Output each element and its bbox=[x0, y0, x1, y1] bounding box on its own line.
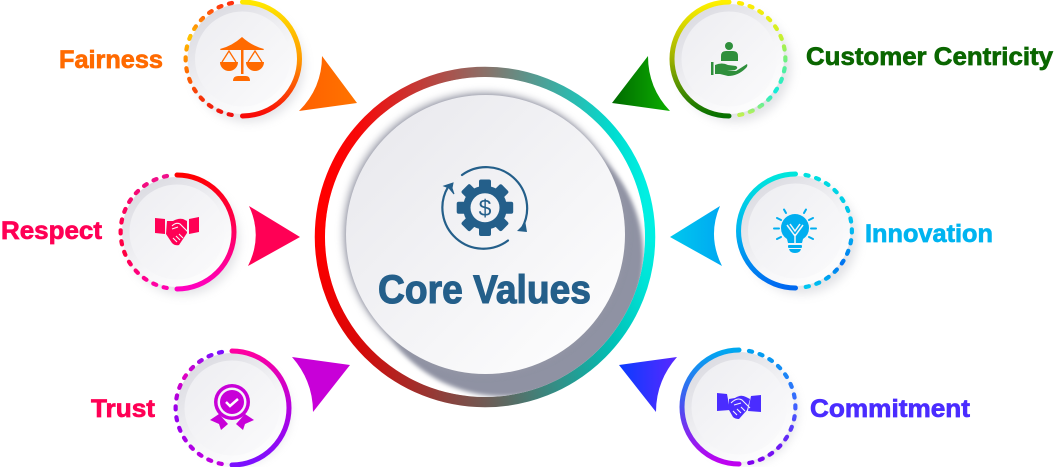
panel: customer centricity badge bbox=[672, 2, 791, 122]
icon: hand holding person bbox=[711, 42, 747, 76]
arrow: innovation bbox=[670, 206, 722, 266]
icon: scales of justice bbox=[220, 37, 264, 81]
panel: respect badge bbox=[121, 175, 239, 295]
panel: trust badge bbox=[176, 351, 290, 465]
arrow: respect bbox=[248, 206, 300, 266]
icon: handshake with cuffs bbox=[155, 217, 199, 245]
label: Commitment: Commitment bbox=[810, 395, 971, 423]
label: Innovation: Innovation bbox=[865, 220, 993, 248]
label: Fairness: Fairness bbox=[59, 46, 163, 74]
label: Respect: Respect bbox=[1, 217, 103, 245]
icon: award medal bbox=[210, 384, 254, 430]
panel: innovation badge bbox=[739, 174, 858, 294]
icon: light bulb bbox=[774, 210, 816, 253]
arrow: trust bbox=[292, 357, 350, 412]
label: Trust: Trust bbox=[91, 395, 156, 423]
icon: gear with dollar and cycle arrows bbox=[442, 167, 527, 249]
panel: commitment badge bbox=[682, 350, 797, 464]
arrow: commitment bbox=[619, 357, 677, 412]
panel: fairness badge bbox=[186, 2, 304, 122]
arrow: customer centricity bbox=[612, 56, 670, 111]
heading: Core Values: Core Values bbox=[378, 268, 591, 312]
panel: central circle bbox=[320, 72, 650, 402]
icon: handshake bbox=[717, 393, 761, 419]
arrow: fairness bbox=[299, 56, 357, 111]
label: Customer Centricity: Customer Centricity bbox=[806, 43, 1053, 71]
icon: gear with dollar and cycle arrows: $ bbox=[479, 195, 492, 221]
